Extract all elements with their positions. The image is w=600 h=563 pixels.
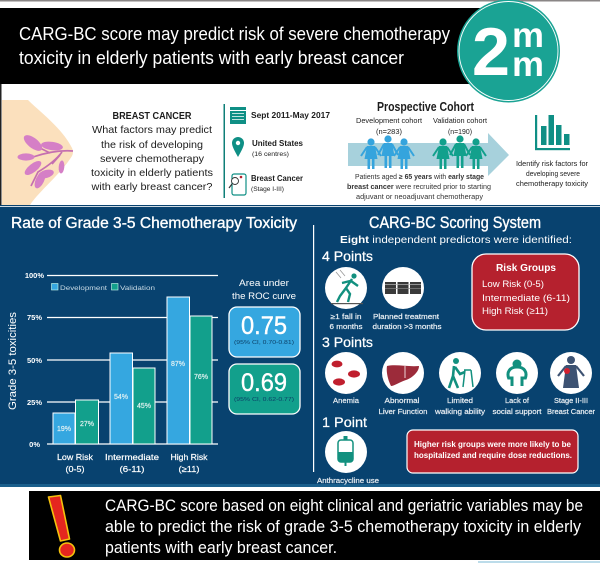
callout: risk groups: High Risk (≥11) [482,306,548,317]
3 point labels: Lack of [505,398,529,405]
prospective cohort diagram: (n=190) [448,127,472,136]
outcome text: developing severe [526,169,580,178]
study details: (Stage I-III) [251,186,284,193]
subheading: Eight independent predictors were identified: [340,234,572,246]
bar chart: 54% [114,394,128,401]
1 point heading: 1 Point [322,414,367,430]
logo: 2 minute medicine [457,0,560,102]
bar chart: 50% [27,356,42,365]
prospective cohort diagram: Development cohort [356,116,423,125]
3 point labels: Anemia [333,398,359,405]
3 point labels [333,398,596,416]
question text: toxicity in elderly patients [91,167,213,179]
conclusion text: patients with early breast cancer. [105,539,337,557]
study details: (16 centres) [252,151,289,158]
prospective cohort diagram: adjuvant or neoadjuvant chemotherapy [356,194,484,201]
bar chart: 75% [27,313,42,322]
3 point labels: Limited [447,398,473,405]
3 point labels: Abnormal [384,398,420,405]
fall label [330,314,363,331]
anthracycline label: Anthracycline use [317,478,379,485]
icon: calendar [230,107,246,124]
legend: Validation [120,285,155,292]
legend [52,284,155,292]
bar chart: 19% [57,426,71,433]
icon: anemia [325,352,367,394]
icon: bar chart [535,115,570,150]
icon: walker [439,352,481,394]
3 point labels: walking ability [434,409,486,416]
icon: exclamation mark [48,496,74,557]
logo: 2 minute medicine: 2 [472,14,510,90]
icon: stage II-III breast cancer [550,352,592,394]
fall label: 6 months [330,324,363,331]
icon: fall [325,267,367,309]
bar chart: Low Risk [57,452,94,462]
title banner: toxicity in elderly patients with early breast cancer [19,47,404,68]
ROC curve callouts [229,278,300,414]
question text: severe chemotherapy [100,153,205,165]
conclusion text [105,497,583,557]
ROC curve callouts: (95% CI, 0.62-0.77) [234,397,294,403]
icon: liver [382,352,424,394]
question text: BREAST CANCER [112,111,192,122]
conclusion text: able to predict the risk of grade 3-5 chemotherapy toxicity in elderly [105,518,582,536]
study details [229,107,330,195]
icon: location pin [232,137,244,157]
legend: Development [60,285,107,292]
icon: treatment calendar pages [382,267,424,309]
outcome text: Identify risk factors for [516,159,588,168]
treatment label: duration >3 months [372,324,442,331]
callout: risk groups: Low Risk (0-5) [482,279,544,290]
callout: risk groups: Intermediate (6-11) [482,293,570,304]
4 points heading: 4 Points [322,248,373,264]
panel: scoring system [317,214,596,485]
heading: CARG-BC Scoring System [369,214,541,232]
3 point labels: Stage II-III [554,398,588,405]
panel: conclusion banner [29,491,600,560]
icon: anthracycline IV bag [325,431,367,473]
prospective cohort diagram: Prospective Cohort [377,100,475,114]
3 points heading: 3 Points [322,334,373,350]
bar chart: (0-5) [66,464,85,474]
ROC curve callouts: Area under [239,278,289,288]
logo: 2 minute medicine: m [512,45,544,84]
ROC curve callouts: 0.75 [241,312,287,340]
fall label: ≥1 fall in [330,314,362,321]
bar chart: 76% [194,374,208,381]
callout: higher risk groups: hospitalized and require dose reductions. [414,451,572,460]
outcome text: chemotherapy toxicity [516,179,588,188]
study details: United States [252,139,304,148]
question text: What factors may predict [92,124,212,136]
title banner [0,8,480,84]
prospective cohort diagram [347,100,509,201]
bar chart: 0% [29,440,40,449]
question text: with early breast cancer? [90,181,213,193]
icon: lack of social support [496,352,538,394]
bar chart: 87% [171,361,185,368]
people: validation cohort [433,135,486,169]
bar chart: 45% [137,403,151,410]
bar chart: 25% [27,398,42,407]
question text [90,111,213,193]
arrow [348,133,509,176]
bar chart: 100% [25,271,44,280]
ROC curve callouts: (95% CI, 0.70-0.81) [234,340,294,346]
title banner: CARG-BC score may predict risk of severe chemotherapy [19,23,451,44]
callout: risk groups [472,254,579,330]
3 point labels: social support [492,409,542,416]
callout: higher risk groups [407,430,578,473]
people: development cohort [361,135,414,169]
callout: risk groups: Risk Groups [496,262,556,274]
icon: breast anatomy [2,100,73,205]
3 point labels: Liver Function [378,409,428,416]
study details: Sept 2011-May 2017 [251,110,330,120]
bar chart: (≥11) [178,464,200,474]
icon: clipboard with magnifier [229,174,246,195]
prospective cohort diagram: Validation cohort [433,116,488,125]
prospective cohort diagram: Patients aged ≥ 65 years with early stage [355,174,484,181]
callout: higher risk groups: Higher risk groups were more likely to be [414,440,572,449]
bar chart: (6-11) [120,464,145,474]
bar chart: 27% [80,421,94,428]
prospective cohort diagram: breast cancer were recruited prior to starting [347,184,491,191]
bar chart: Grade 3-5 toxicities [7,311,19,410]
prospective cohort diagram: (n=283) [376,127,402,136]
bar chart [7,271,218,474]
outcome text [516,159,588,188]
3 point labels: Breast Cancer [547,409,596,416]
question text: the risk of developing [101,139,203,151]
ROC curve callouts: the ROC curve [232,291,296,301]
logo: 2 minute medicine: m [512,16,544,55]
study details: Breast Cancer [251,174,303,183]
treatment label [372,314,442,331]
bar chart: Intermediate [105,452,159,462]
heading: Rate of Grade 3-5 Chemotherapy Toxicity [11,215,297,232]
panel: blue background [0,205,600,487]
treatment label: Planned treatment [373,314,439,321]
ROC curve callouts: 0.69 [241,369,287,397]
bar chart: High Risk [170,452,208,462]
panel: toxicity chart [7,215,300,474]
